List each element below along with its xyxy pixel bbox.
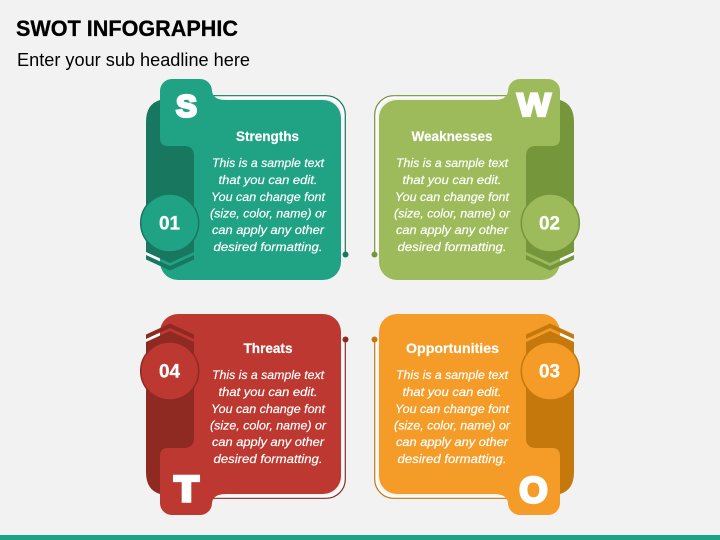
body text: opportunities: You can change font: [395, 402, 510, 416]
body text: opportunities: [394, 368, 511, 466]
body text: strengths: that you can edit.: [218, 173, 318, 187]
heading: opportunities: Opportunities: [406, 340, 499, 356]
title: SWOT INFOGRAPHIC: [16, 16, 238, 41]
letter O: O: [519, 469, 548, 510]
body text: weaknesses: You can change font: [395, 190, 510, 204]
body text: threats: You can change font: [211, 402, 326, 416]
letter T: T: [174, 470, 198, 509]
body text: weaknesses: (size, color, name) or: [394, 206, 511, 220]
body text: threats: This is a sample text: [212, 368, 325, 382]
body text: weaknesses: can apply any other: [396, 223, 509, 237]
body text: opportunities: This is a sample text: [396, 368, 509, 382]
body text: strengths: This is a sample text: [212, 156, 325, 170]
body text: threats: desired formatting.: [214, 452, 322, 466]
body text: opportunities: that you can edit.: [402, 385, 502, 399]
body text: weaknesses: [394, 156, 511, 254]
bottom bar: [0, 535, 720, 540]
panel: strengths: [141, 79, 348, 280]
body text: strengths: You can change font: [211, 190, 326, 204]
number 04: 04: [159, 362, 180, 382]
card shape: threats: [141, 314, 348, 515]
card shape: opportunities: [372, 314, 579, 515]
letter S: S: [176, 88, 197, 123]
body text: threats: can apply any other: [212, 435, 325, 449]
subtitle: Enter your sub headline here: [17, 50, 250, 70]
heading: strengths: Strengths: [236, 128, 299, 144]
body text: strengths: can apply any other: [212, 223, 325, 237]
letter W: W: [517, 87, 552, 123]
panel: opportunities: [372, 314, 579, 515]
body text: strengths: desired formatting.: [214, 240, 322, 254]
number 01: 01: [159, 214, 180, 234]
body text: opportunities: desired formatting.: [398, 452, 506, 466]
panel: weaknesses: [372, 79, 579, 280]
number 03: 03: [539, 362, 560, 382]
body text: opportunities: (size, color, name) or: [394, 418, 511, 432]
card shape: weaknesses: [372, 79, 579, 280]
body text: threats: [210, 368, 327, 466]
body text: threats: that you can edit.: [218, 385, 318, 399]
number 02: 02: [539, 214, 560, 234]
body text: strengths: (size, color, name) or: [210, 206, 327, 220]
body text: opportunities: can apply any other: [396, 435, 509, 449]
body text: weaknesses: This is a sample text: [396, 156, 509, 170]
panel: threats: [141, 314, 348, 515]
card shape: strengths: [141, 79, 348, 280]
body text: threats: (size, color, name) or: [210, 418, 327, 432]
body text: weaknesses: that you can edit.: [402, 173, 502, 187]
body text: strengths: [210, 156, 327, 254]
heading: threats: Threats: [244, 340, 293, 356]
heading: weaknesses: Weaknesses: [412, 128, 493, 144]
body text: weaknesses: desired formatting.: [398, 240, 506, 254]
